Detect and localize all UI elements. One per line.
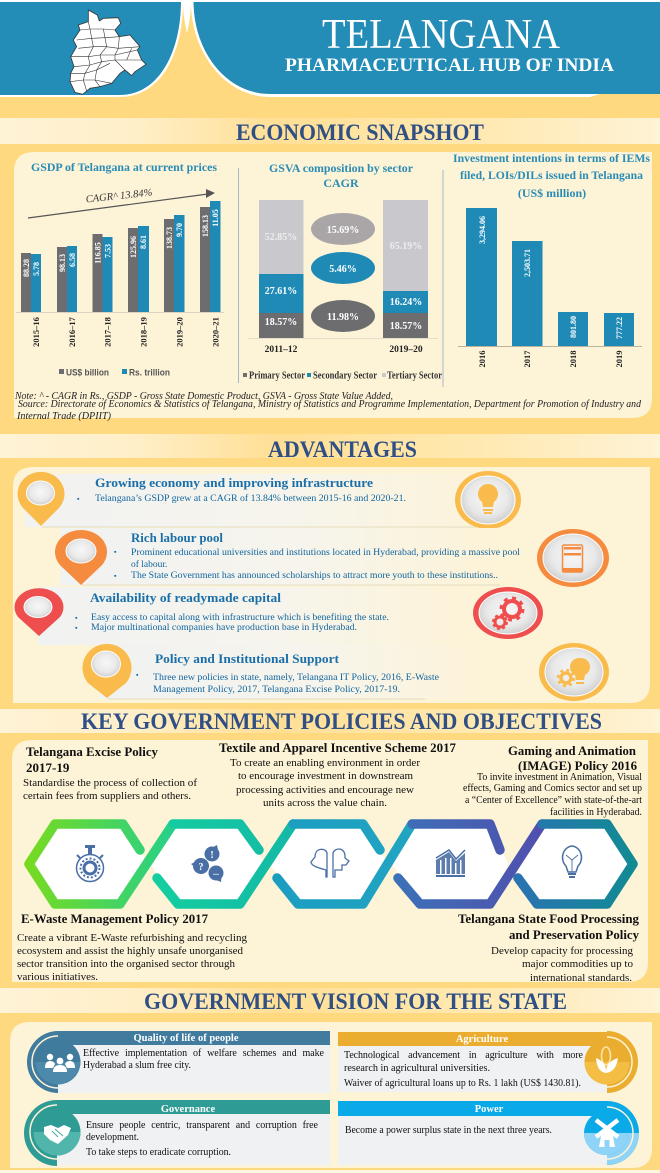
icon: speech bubbles: ... (213, 868, 219, 877)
heading: economic snapshot: ECONOMIC SNAPSHOT (236, 120, 484, 145)
advantage: rich labour pool: Rich labour pool (131, 530, 223, 545)
heading: advantages: ADVANTAGES (268, 437, 417, 462)
stacked bar 2011-12: 52.85% (265, 232, 297, 243)
year labels: 2017 (522, 350, 532, 368)
icon: light bulb (563, 846, 581, 878)
icon: gear and bulb badge (539, 643, 609, 701)
icon: windmill (584, 1101, 639, 1165)
icon: bar chart (436, 850, 465, 877)
policy: e-waste: Create a vibrant E-Waste refurbishing and recycling (17, 933, 247, 944)
bar values: 5.78 (32, 262, 41, 276)
card: agriculture: research in agricultural universities. (344, 1063, 490, 1074)
note and source: Note: ^ - CAGR in Rs., GSDP - Gross State Domestic Product, GSVA - Gross State Value Added, (14, 391, 393, 402)
bar values (22, 209, 220, 277)
chart title: filed, LOIs/DILs issued in Telangana (460, 168, 643, 182)
stacked bar 2019-20: 65.19% (390, 241, 422, 252)
policy: gaming and animation: a “Center of Excellence” with state-of-the-art (465, 795, 642, 806)
policy: textile and apparel: processing activities and encourage new (236, 785, 415, 796)
policy: gaming and animation: Gaming and Animation (508, 743, 637, 758)
advantage: readymade capital: ▪ (75, 614, 78, 622)
chart title (453, 151, 650, 200)
values: 2,503.71 (523, 249, 532, 277)
chart: investment intentions (453, 151, 650, 368)
icon: corn (584, 1031, 638, 1093)
CAGR ellipses: 11.98% (327, 312, 359, 323)
card: quality of life (27, 1031, 330, 1093)
bar values: 116.85 (94, 242, 102, 264)
policy: gaming and animation: (IMAGE) Policy 2016 (518, 758, 637, 773)
heading: key government policies: KEY GOVERNMENT POLICIES AND OBJECTIVES (81, 709, 602, 734)
bar values: 6.58 (68, 253, 77, 267)
advantage: readymade capital: Major multinational companies have production base in Hyderabad. (91, 623, 357, 633)
policy: textile and apparel: units across the value chain. (263, 798, 387, 809)
card: agriculture (338, 1031, 638, 1093)
advantage: growing economy: ▪ (77, 495, 80, 503)
card: power: Become a power surplus state in the next three years. (345, 1125, 552, 1136)
legend: Secondary Sector (313, 370, 377, 382)
arrow: CAGR trend: CAGR^ 13.84% (85, 188, 153, 205)
policy: excise: Telangana Excise Policy (26, 744, 158, 759)
bars: US$ billion (21, 207, 210, 312)
chart: GSVA composition (243, 161, 442, 382)
policy: gaming and animation: To invite investment in Animation, Visual (477, 772, 642, 783)
card: agriculture: Agriculture (456, 1034, 508, 1045)
bars: Rs. trillion (31, 201, 220, 312)
note and source: Source: Directorate of Economics & Statistics of Telangana, Ministry of Statistics and Programme Implementation, Department for Promotion of Industry and (18, 399, 642, 410)
subtitle: PHARMACEUTICAL HUB OF INDIA (285, 55, 614, 76)
year axis labels: 2019–20 (174, 317, 184, 347)
CAGR ellipses: 15.69% (327, 225, 359, 236)
chart title: GSDP of Telangana at current prices (31, 160, 217, 174)
icon: speech bubbles (191, 845, 224, 882)
year labels (477, 350, 624, 368)
policy: e-waste: E-Waste Management Policy 2017 (21, 911, 208, 926)
legend: Rs. trillion (129, 368, 170, 378)
policy: food processing: major commodities up to (522, 959, 633, 970)
icon: heads (311, 849, 349, 877)
year axis labels: 2020–21 (210, 317, 220, 347)
bar values: 11.05 (211, 209, 220, 227)
advantage: policy support (82, 643, 609, 701)
card: power (338, 1101, 639, 1165)
panel: key government policies (12, 740, 648, 984)
year labels: 2018 (568, 350, 578, 368)
advantage: readymade capital: Availability of readymade capital (90, 590, 281, 605)
policy: gaming and animation (463, 743, 642, 818)
card: governance: Governance (161, 1104, 215, 1115)
advantage: rich labour pool: The State Government has announced scholarships to attract more youth to these institutions.. (131, 571, 498, 581)
icon: pin (55, 530, 107, 585)
chart: GSDP at current prices (16, 160, 224, 378)
chart title: GSVA composition by sector (269, 161, 414, 175)
year labels: 2019 (614, 350, 624, 368)
advantage: growing economy (18, 471, 521, 529)
advantage: rich labour pool: ▪ (114, 572, 117, 580)
advantage: readymade capital: Easy access to capital along with infrastructure which is benefiting the state. (91, 612, 389, 623)
legend: Tertiary Sector (387, 370, 442, 382)
policy: food processing: international standards. (530, 973, 632, 984)
note and source: Internal Trade (DPIIT) (16, 411, 112, 422)
icon: tablet badge (537, 529, 609, 587)
policy: textile and apparel: To create an enabling environment in order (230, 758, 421, 769)
year axis labels: 2018–19 (138, 317, 148, 347)
policy: e-waste: sector transition into the organised sector through (17, 959, 235, 970)
icon: pin (18, 472, 64, 526)
stacked bar 2019-20: 16.24% (390, 297, 422, 308)
bar values: 98.13 (58, 254, 67, 272)
icon: Telangana map (70, 10, 146, 94)
advantage: policy support: Policy and Institutional Support (155, 651, 340, 666)
arrow: CAGR trend (28, 188, 215, 218)
card: agriculture: Waiver of agricultural loans up to Rs. 1 lakh (US$ 1430.81). (344, 1078, 581, 1089)
card: quality of life: Effective implementation of welfare schemes and make (83, 1048, 325, 1059)
card: governance: Ensure people centric, transparent and corruption free (86, 1120, 319, 1131)
bar values: 158.13 (201, 215, 210, 237)
hexagon chain (29, 824, 633, 904)
year axis labels (31, 316, 220, 347)
advantage: readymade capital (14, 587, 543, 645)
advantage: rich labour pool: of labour. (131, 559, 167, 570)
icon: pin (82, 644, 131, 698)
policy: gaming and animation: facilities in Hyderabad. (550, 807, 642, 818)
icon: people (27, 1031, 80, 1093)
header banner (0, 2, 660, 97)
legend (59, 368, 170, 378)
card: governance (24, 1100, 330, 1166)
advantage: policy support: Three new policies in state, namely, Telangana IT Policy, 2016, E-Waste (153, 673, 439, 683)
bar values: 138.73 (165, 227, 174, 249)
values: 777.22 (615, 317, 624, 339)
policy: excise: Standardise the process of collection of (23, 778, 198, 789)
year axis labels: 2016–17 (67, 316, 77, 347)
policy: food processing (458, 911, 639, 984)
panel: economic snapshot (14, 151, 652, 422)
stacked bar 2019-20: 2019–20 (389, 345, 423, 355)
panel: advantages (13, 467, 650, 703)
card: governance: To take steps to eradicate corruption. (86, 1147, 231, 1158)
stacked bar 2011-12 (259, 200, 304, 355)
icon: bulb badge (455, 471, 521, 529)
bars (466, 208, 634, 346)
policy: excise: certain fees from suppliers and others. (23, 791, 191, 802)
policy: e-waste: various initiatives. (17, 972, 98, 983)
policy: textile and apparel: to encourage investment in downstream (238, 771, 413, 782)
chart title: Investment intentions in terms of IEMs (453, 151, 650, 165)
heading: government vision: GOVERNMENT VISION FOR THE STATE (144, 989, 567, 1014)
year labels: 2016 (477, 350, 487, 368)
bar values: 7.53 (104, 244, 112, 258)
advantage: rich labour pool: ▪ (114, 548, 117, 556)
note and source (14, 391, 642, 422)
card: governance: development. (86, 1132, 139, 1143)
legend: Primary Sector (249, 370, 305, 382)
icon: speech bubbles: ? (198, 862, 204, 873)
chart: GSVA composition: CAGR (323, 176, 359, 190)
bar values: 88.28 (22, 259, 31, 277)
bar values: 9.70 (175, 223, 184, 237)
policy: e-waste (17, 911, 247, 983)
advantage: readymade capital: ▪ (75, 624, 78, 632)
icon: pin (14, 588, 63, 636)
year axis labels: 2017–18 (102, 317, 112, 347)
advantage: rich labour pool (55, 528, 609, 587)
policy: textile and apparel: Textile and Apparel Incentive Scheme 2017 (219, 740, 456, 755)
year axis labels: 2015–16 (31, 317, 41, 347)
CAGR ellipses: 5.46% (329, 264, 357, 275)
card: quality of life: Hyderabad a slum free city. (83, 1060, 191, 1071)
card: agriculture: Technological advancement in agriculture with more (344, 1050, 584, 1061)
values: 3,294.06 (478, 216, 487, 244)
stacked bar 2011-12: 18.57% (265, 317, 297, 328)
stacked bar 2019-20 (383, 200, 428, 355)
icon: speech bubbles: ! (210, 850, 214, 861)
policy: excise (23, 744, 198, 802)
values (478, 216, 624, 339)
bar values: 125.96 (129, 236, 138, 258)
legend (243, 370, 442, 382)
legend: US$ billion (66, 368, 109, 378)
policy: e-waste: ecosystem and assist the highly unsafe unorganised (17, 946, 243, 957)
card: quality of life: Quality of life of people (134, 1033, 239, 1044)
panel: government vision (10, 1022, 652, 1168)
advantage: growing economy: Growing economy and improving infrastructure (95, 475, 373, 490)
stacked bar 2019-20: 18.57% (390, 321, 422, 332)
stacked bar 2011-12: 27.61% (265, 286, 297, 297)
chart title: (US$ million) (518, 186, 586, 200)
advantage: policy support: Management Policy, 2017, Telangana Excise Policy, 2017-19. (153, 685, 400, 695)
card: power: Power (475, 1104, 504, 1115)
advantage: policy support: ▪ (136, 671, 139, 679)
advantage: rich labour pool: Prominent educational universities and institutions located in Hyderabad, providing a massive pool (131, 548, 520, 558)
policy: food processing: and Preservation Policy (509, 927, 639, 942)
values: 801.80 (569, 316, 578, 338)
stacked bar 2011-12: 2011–12 (265, 345, 298, 355)
title: TELANGANA (322, 12, 561, 58)
CAGR ellipses (311, 213, 375, 332)
icon: stopwatch (76, 845, 104, 882)
advantage: growing economy: Telangana’s GSDP grew at a CAGR of 13.84% between 2015-16 and 2020-21. (95, 493, 406, 504)
policy: food processing: Develop capacity for processing (491, 946, 633, 957)
bar values: 8.61 (139, 235, 148, 249)
policy: gaming and animation: effects, Gaming and Comics sector and set up (463, 783, 642, 794)
icon: handshake (24, 1100, 80, 1166)
icon: gears badge (473, 587, 543, 639)
policy: textile and apparel (219, 740, 456, 809)
policy: excise: 2017-19 (26, 760, 70, 775)
policy: food processing: Telangana State Food Processing (458, 911, 639, 926)
